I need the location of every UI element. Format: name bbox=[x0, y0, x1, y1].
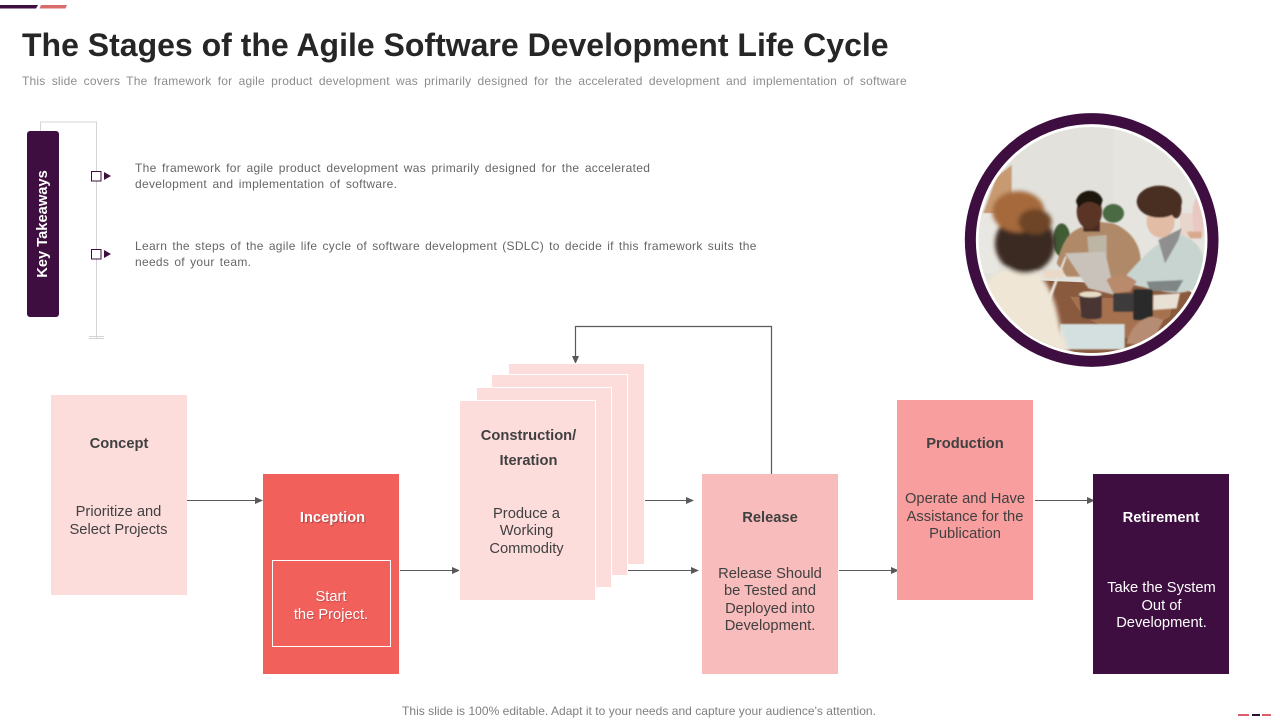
construction text: Produce a bbox=[493, 506, 560, 522]
construction heading: Construction/ bbox=[481, 428, 576, 444]
stage: concept bbox=[51, 395, 187, 595]
stage: retirement bbox=[1093, 474, 1229, 674]
bottom right accent bars bbox=[1238, 714, 1271, 716]
top accent bars bbox=[0, 5, 67, 8]
release heading: Release bbox=[742, 510, 798, 526]
inception text: the Project. bbox=[294, 607, 368, 623]
stack card 1 with text bbox=[459, 400, 596, 601]
retirement text: Take the System bbox=[1107, 580, 1216, 596]
inception text bbox=[294, 589, 368, 624]
concept text: Select Projects bbox=[70, 522, 167, 538]
construction text bbox=[489, 506, 564, 557]
construction heading: Iteration bbox=[500, 453, 557, 469]
takeaway text 2: needs of your team. bbox=[135, 255, 251, 269]
photo: team meeting in circular frame bbox=[964, 113, 1218, 367]
construction text: Working bbox=[500, 523, 553, 539]
stack card 2 bbox=[476, 387, 612, 588]
production heading: Production bbox=[926, 436, 1004, 452]
takeaway text 1 bbox=[135, 161, 650, 191]
arrow: release to production bbox=[839, 567, 897, 574]
bullet marker 2 bbox=[91, 249, 111, 260]
inception inner box bbox=[272, 560, 391, 647]
release text: Development. bbox=[725, 618, 815, 634]
inception text: Start bbox=[315, 589, 347, 605]
subtitle: This slide covers The framework for agile product development was primarily designed for the accelerated development and implementation of software bbox=[22, 74, 907, 88]
retirement text bbox=[1107, 580, 1216, 631]
stack card 3 bbox=[491, 374, 628, 576]
arrow: production to retirement bbox=[1035, 497, 1093, 504]
retirement text: Development. bbox=[1116, 615, 1207, 631]
retirement text: Out of bbox=[1141, 598, 1182, 614]
concept heading: Concept bbox=[90, 436, 148, 452]
bullet marker 1 bbox=[91, 171, 111, 182]
key takeaways label bbox=[27, 131, 59, 317]
arrow: construction to release lower bbox=[628, 567, 699, 574]
concept text bbox=[70, 504, 167, 538]
stage: release bbox=[702, 474, 838, 674]
footer note: This slide is 100% editable. Adapt it to your needs and capture your audience's attention. bbox=[402, 704, 876, 718]
production text: Publication bbox=[929, 526, 1001, 542]
takeaway text 1: development and implementation of software. bbox=[135, 177, 397, 191]
stack card 4 bbox=[508, 363, 645, 565]
production text: Assistance for the bbox=[907, 509, 1023, 525]
arrow: inception to construction bbox=[400, 567, 459, 574]
key takeaways text: Key Takeaways bbox=[35, 170, 51, 278]
inception heading: Inception bbox=[300, 510, 365, 526]
key takeaways connector line bbox=[40, 122, 104, 339]
release text: be Tested and bbox=[724, 583, 816, 599]
production text bbox=[905, 491, 1025, 542]
stage: inception bbox=[263, 474, 399, 674]
release text: Deployed into bbox=[725, 601, 815, 617]
production text: Operate and Have bbox=[905, 491, 1025, 507]
release text bbox=[718, 566, 822, 634]
release text: Release Should bbox=[718, 566, 822, 582]
retirement heading: Retirement bbox=[1123, 510, 1199, 526]
arrow: concept to inception bbox=[187, 497, 263, 504]
stage: construction stacked cards bbox=[459, 363, 644, 600]
concept text: Prioritize and bbox=[76, 504, 161, 520]
stage: production bbox=[897, 400, 1033, 600]
construction heading bbox=[481, 428, 576, 469]
takeaway text 2 bbox=[135, 239, 757, 269]
takeaway text 2: Learn the steps of the agile life cycle of software development (SDLC) to decide if this framework suits the bbox=[135, 239, 757, 253]
arrow: construction to release upper bbox=[645, 497, 694, 504]
title: The Stages of the Agile Software Development Life Cycle bbox=[22, 27, 889, 63]
takeaway text 1: The framework for agile product development was primarily designed for the accelerated bbox=[135, 161, 650, 175]
construction text: Commodity bbox=[489, 541, 564, 557]
